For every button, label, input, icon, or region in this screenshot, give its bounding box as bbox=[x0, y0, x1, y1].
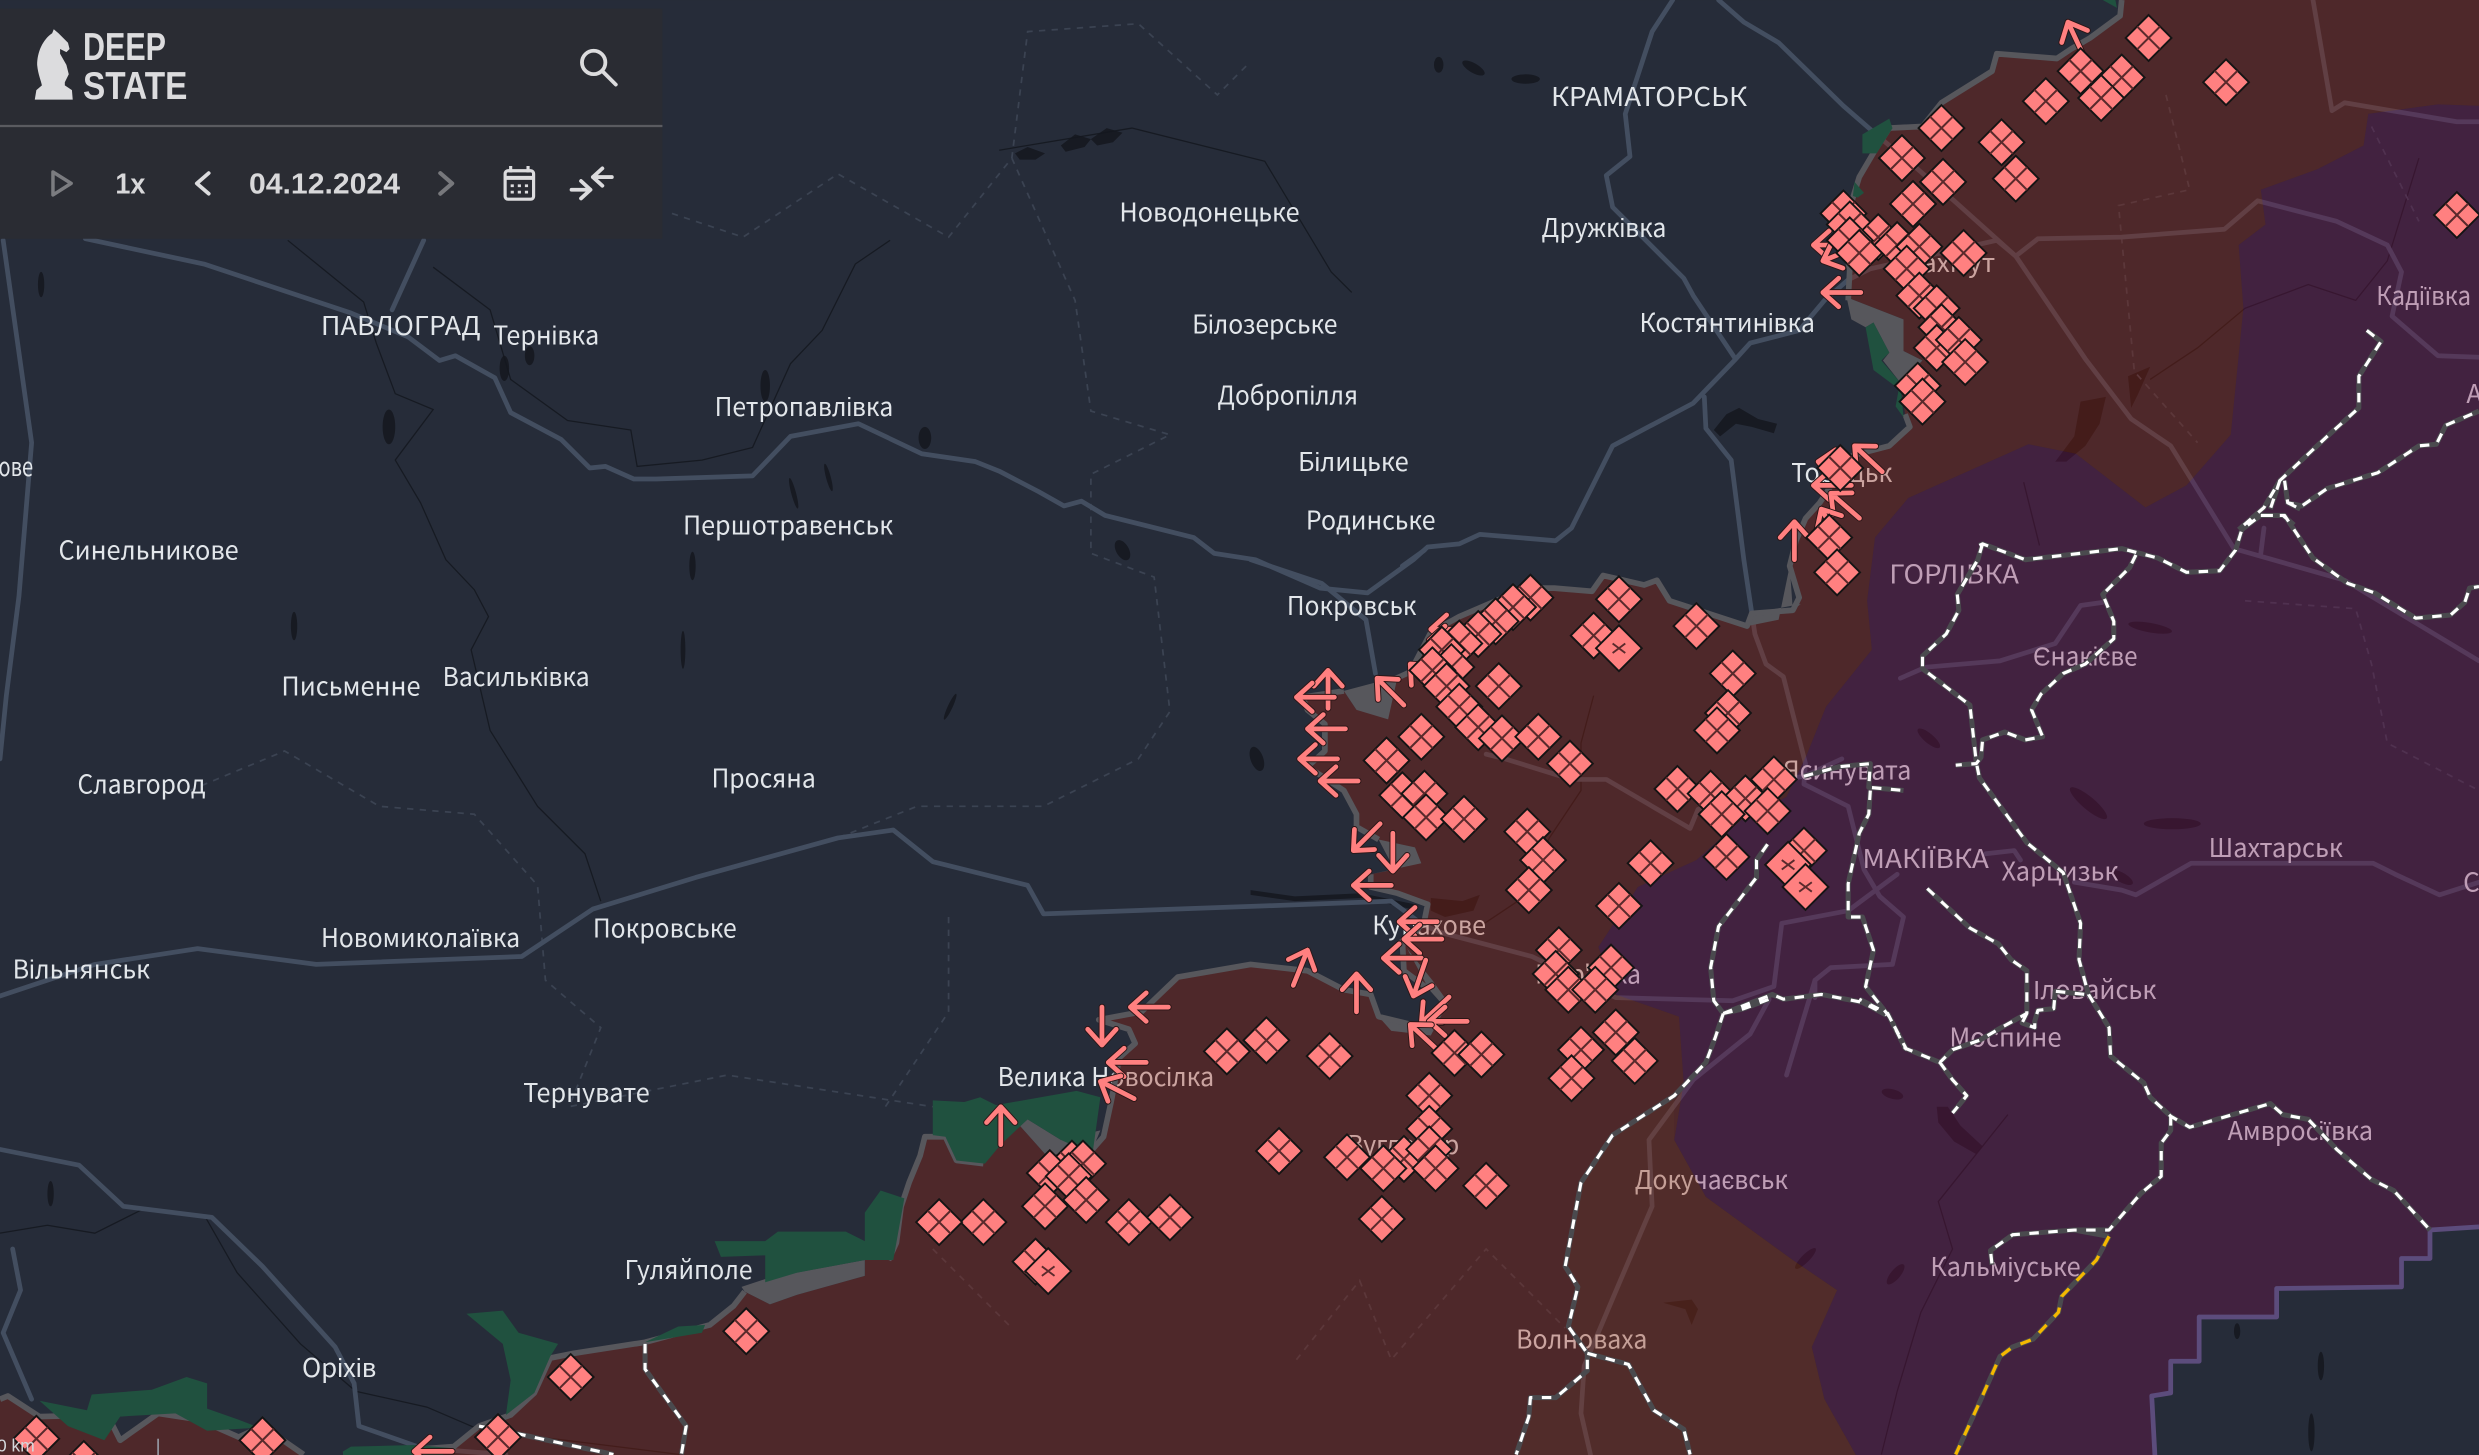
city labels: Костянтинівка bbox=[1639, 302, 1815, 340]
city labels: ГОРЛІВКА bbox=[1889, 553, 2019, 591]
icon: search bbox=[582, 51, 616, 85]
city labels: Вугледар bbox=[1347, 1124, 1459, 1162]
city labels: Тернівка bbox=[493, 315, 599, 353]
city labels: Іловайськ bbox=[2033, 969, 2157, 1007]
city labels: Добропілля bbox=[1217, 375, 1358, 413]
control panel bbox=[0, 9, 662, 239]
railways bbox=[479, 330, 2479, 1455]
city labels: Просяна bbox=[711, 757, 816, 795]
advance arrows bbox=[414, 16, 2097, 1455]
city labels: Шахтарськ bbox=[2209, 827, 2344, 865]
city labels: Тернувате bbox=[523, 1072, 650, 1110]
state border bbox=[2152, 1227, 2479, 1455]
city labels: Родинське bbox=[1306, 500, 1436, 538]
city labels: Велика Новосілка bbox=[998, 1056, 1214, 1094]
city labels: Петропавлівка bbox=[715, 386, 893, 424]
logo text: DEEP bbox=[83, 26, 166, 69]
city labels: Першотравенськ bbox=[683, 504, 894, 542]
city labels: Єнакієве bbox=[2033, 636, 2138, 674]
city labels: Ясинувата bbox=[1783, 749, 1911, 787]
icon: next day bbox=[440, 173, 452, 194]
icon: calendar bbox=[505, 166, 534, 199]
city labels: Покровськ bbox=[1287, 585, 1417, 623]
city labels: Синельникове bbox=[58, 530, 239, 568]
icon: play bbox=[53, 172, 71, 195]
city labels: Докучаєвськ bbox=[1635, 1159, 1789, 1197]
city labels: Васильківка bbox=[443, 656, 590, 694]
city labels: Торецьк bbox=[1791, 452, 1893, 490]
logo text bbox=[83, 26, 187, 108]
city labels: Письменне bbox=[281, 666, 421, 704]
city labels: Дружківка bbox=[1541, 207, 1666, 245]
city labels: Кадіївка bbox=[2376, 275, 2471, 313]
city labels: Харцизьк bbox=[2002, 851, 2119, 889]
occupied before 2022 (purple zone) bbox=[1598, 104, 2479, 1455]
playback speed: 1x bbox=[115, 169, 146, 201]
city labels: Славгород bbox=[77, 764, 206, 802]
city labels: Курахове bbox=[1372, 904, 1486, 942]
date: 04.12.2024 bbox=[249, 169, 400, 201]
city labels: Амвросіївка bbox=[2228, 1110, 2373, 1148]
city labels: Волноваха bbox=[1516, 1319, 1647, 1357]
city labels: Новомиколаївка bbox=[321, 917, 520, 955]
city labels: Моспине bbox=[1949, 1017, 2062, 1055]
city labels: ПАВЛОГРАД bbox=[321, 305, 481, 343]
city labels: Новодонецьке bbox=[1119, 191, 1300, 229]
logo: knight icon bbox=[35, 29, 73, 100]
city labels: Білицьке bbox=[1298, 441, 1409, 479]
icon: collapse arrows bbox=[572, 168, 612, 198]
logo text: STATE bbox=[83, 65, 187, 108]
city labels: Кальміуське bbox=[1930, 1246, 2081, 1284]
city labels: Вільнянськ bbox=[13, 949, 151, 987]
city labels: Бахмут bbox=[1905, 242, 1995, 280]
icon: previous day bbox=[197, 173, 209, 194]
brown tint zone near Dokuchaievsk bbox=[1516, 1096, 1856, 1455]
city labels: Оріхів bbox=[302, 1347, 376, 1385]
city labels: МАКІЇВКА bbox=[1862, 838, 1989, 876]
city labels: Мар'їнка bbox=[1535, 953, 1641, 991]
city labels: Покровське bbox=[593, 908, 737, 946]
city labels: Білозерське bbox=[1192, 304, 1338, 342]
city labels: КРАМАТОРСЬК bbox=[1551, 76, 1747, 114]
city labels: Гуляйполе bbox=[624, 1249, 753, 1287]
